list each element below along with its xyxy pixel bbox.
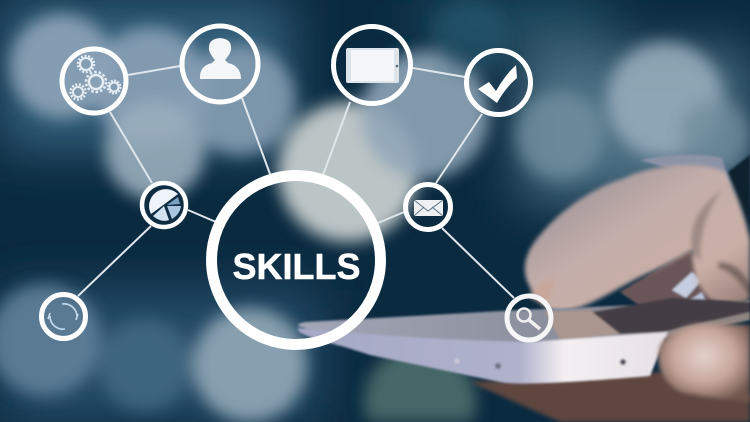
heading: SKILLS: SKILLS xyxy=(232,246,361,287)
hand: palm under phone xyxy=(470,372,750,422)
icon: magnifier xyxy=(507,296,551,340)
hand: index finger and knuckles xyxy=(525,165,750,312)
hand: thumb xyxy=(658,323,750,402)
icon: pie chart xyxy=(142,183,186,227)
icon: gears xyxy=(62,49,126,113)
connector lines xyxy=(78,66,514,298)
smartphone xyxy=(298,298,750,384)
central circle xyxy=(212,176,380,344)
icon: check mark xyxy=(466,50,530,114)
icon: refresh xyxy=(42,294,86,338)
icon: tablet xyxy=(334,26,410,104)
icon: person xyxy=(182,26,258,102)
hand: cuff and shadowed background fingers xyxy=(620,154,750,312)
icon: envelope xyxy=(406,184,450,230)
